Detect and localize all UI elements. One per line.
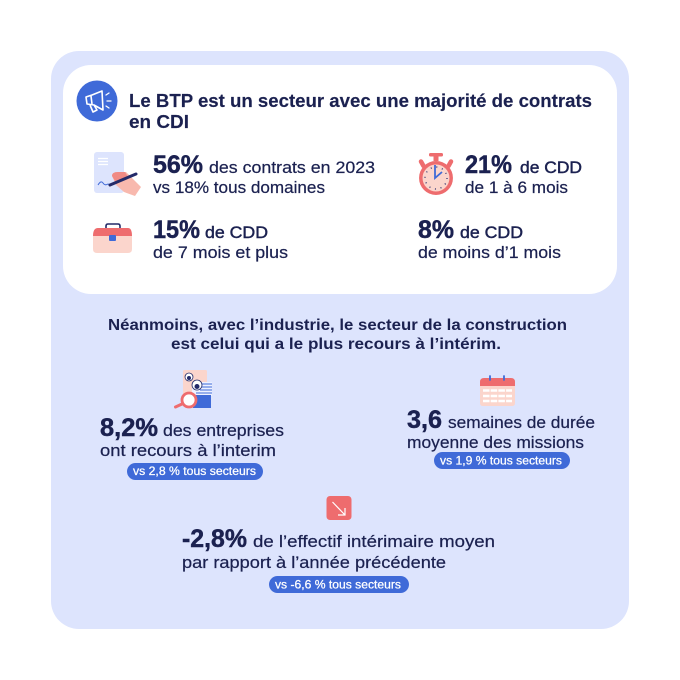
stat: -2,8% bbox=[182, 525, 495, 572]
stat: 15%: 15% bbox=[153, 216, 200, 244]
stat: 8,2%: ont recours à l’interim bbox=[100, 442, 276, 460]
stat: 8%: de moins d’1 mois bbox=[418, 244, 561, 262]
background panel bbox=[51, 51, 629, 629]
icon: down arrow bbox=[326, 496, 352, 520]
stat: 3,6: semaines de durée bbox=[448, 414, 595, 432]
stat: 8,2%: 8,2% bbox=[100, 414, 158, 442]
badge: vs -6,6 % bbox=[269, 576, 409, 593]
stat: -2,8%: -2,8% bbox=[182, 525, 247, 553]
stat: 56%: vs 18% tous domaines bbox=[153, 179, 325, 197]
stat: 3,6: moyenne des missions bbox=[407, 434, 584, 452]
icon: briefcase bbox=[93, 224, 132, 253]
stat: 8,2% bbox=[100, 414, 284, 460]
badge: vs 1,9 %: vs 1,9 % tous secteurs bbox=[440, 456, 562, 468]
stat: 3,6: 3,6 bbox=[407, 406, 442, 434]
heading: interim: est celui qui a le plus recours à l’intérim. bbox=[171, 336, 501, 353]
heading: interim: Néanmoins, avec l’industrie, le secteur de la construction bbox=[108, 317, 567, 334]
stat: 8%: de CDD bbox=[460, 224, 523, 242]
title bbox=[129, 91, 592, 132]
stat: 21%: 21% bbox=[465, 151, 512, 179]
stat: -2,8%: de l’effectif intérimaire moyen bbox=[253, 533, 495, 551]
panel: contracts card bbox=[63, 65, 617, 294]
stat: 21% bbox=[465, 151, 582, 197]
badge: vs 2,8 % bbox=[127, 463, 263, 480]
badge: vs -6,6 %: vs -6,6 % tous secteurs bbox=[275, 580, 401, 592]
stat: 8% bbox=[418, 216, 561, 262]
stat: 56%: des contrats en 2023 bbox=[209, 159, 375, 177]
title: Le BTP est un secteur avec une majorité de contrats bbox=[129, 91, 592, 111]
icon: calendar bbox=[480, 376, 515, 406]
heading: interim bbox=[108, 317, 567, 353]
stat: 21%: de 1 à 6 mois bbox=[465, 179, 568, 197]
stat: 15%: de CDD bbox=[205, 224, 268, 242]
stat: -2,8%: par rapport à l’année précédente bbox=[182, 554, 446, 572]
icon: megaphone bbox=[76, 80, 118, 122]
stat: 8%: 8% bbox=[418, 216, 454, 244]
stat: 8,2%: des entreprises bbox=[163, 422, 284, 440]
icon: signed document bbox=[94, 152, 141, 196]
stat: 3,6 bbox=[407, 406, 595, 452]
icon: stopwatch bbox=[421, 153, 451, 193]
badge: vs 2,8 %: vs 2,8 % tous secteurs bbox=[133, 466, 256, 478]
stat: 15%: de 7 mois et plus bbox=[153, 244, 288, 262]
stat: 15% bbox=[153, 216, 288, 262]
badge: vs 1,9 % bbox=[434, 452, 570, 469]
icon: CVs and magnifier bbox=[176, 370, 212, 408]
stat: 21%: de CDD bbox=[520, 159, 582, 177]
stat: 56% bbox=[153, 151, 375, 197]
title: en CDI bbox=[129, 112, 189, 132]
stat: 56%: 56% bbox=[153, 151, 203, 179]
